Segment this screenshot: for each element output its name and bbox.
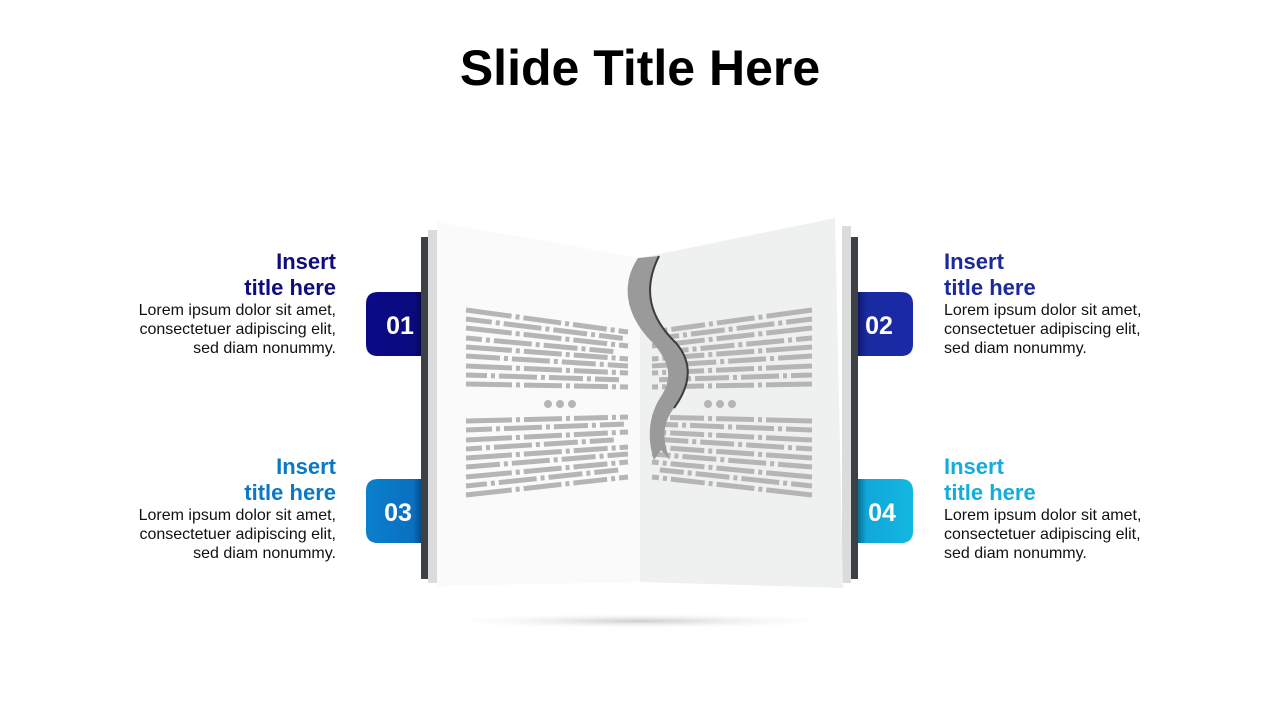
tab 03: 03 (384, 499, 412, 527)
tab 02 (855, 292, 913, 356)
text block 04 (944, 454, 1141, 562)
left page (437, 222, 640, 586)
text block 02: Lorem ipsum dolor sit amet, (944, 302, 1141, 319)
text block 03 (139, 454, 336, 562)
text block 01: sed diam nonummy. (193, 340, 336, 357)
text block 02: title here (944, 275, 1036, 300)
book covers (421, 226, 858, 583)
text block 02: Insert (944, 249, 1004, 274)
text block 01 (139, 249, 336, 357)
text block 03: sed diam nonummy. (193, 545, 336, 562)
text block 01: consectetuer adipiscing elit, (139, 321, 336, 338)
shadow (430, 613, 850, 629)
text block 04: title here (944, 480, 1036, 505)
tab 01 (366, 292, 425, 356)
text block 02: sed diam nonummy. (944, 340, 1087, 357)
text rows right page (652, 310, 812, 495)
tab 04: 04 (868, 499, 896, 527)
tab 03 (366, 479, 425, 543)
tab 01: 01 (386, 312, 414, 340)
text block 01: Insert (276, 249, 336, 274)
text block 01: Lorem ipsum dolor sit amet, (139, 302, 336, 319)
text block 03: Insert (276, 454, 336, 479)
title: Slide Title Here (460, 40, 820, 96)
text block 04: sed diam nonummy. (944, 545, 1087, 562)
text block 04: Lorem ipsum dolor sit amet, (944, 507, 1141, 524)
ellipsis dots (544, 400, 736, 408)
text block 02 (944, 249, 1141, 357)
bookmark ribbon (628, 256, 688, 460)
text block 04: consectetuer adipiscing elit, (944, 526, 1141, 543)
tab 02: 02 (865, 312, 893, 340)
text block 03: Lorem ipsum dolor sit amet, (139, 507, 336, 524)
tab 04 (855, 479, 913, 543)
text block 04: Insert (944, 454, 1004, 479)
right page (640, 218, 843, 588)
text rows left page (466, 310, 628, 495)
text block 03: consectetuer adipiscing elit, (139, 526, 336, 543)
text block 03: title here (244, 480, 336, 505)
text block 02: consectetuer adipiscing elit, (944, 321, 1141, 338)
text block 01: title here (244, 275, 336, 300)
